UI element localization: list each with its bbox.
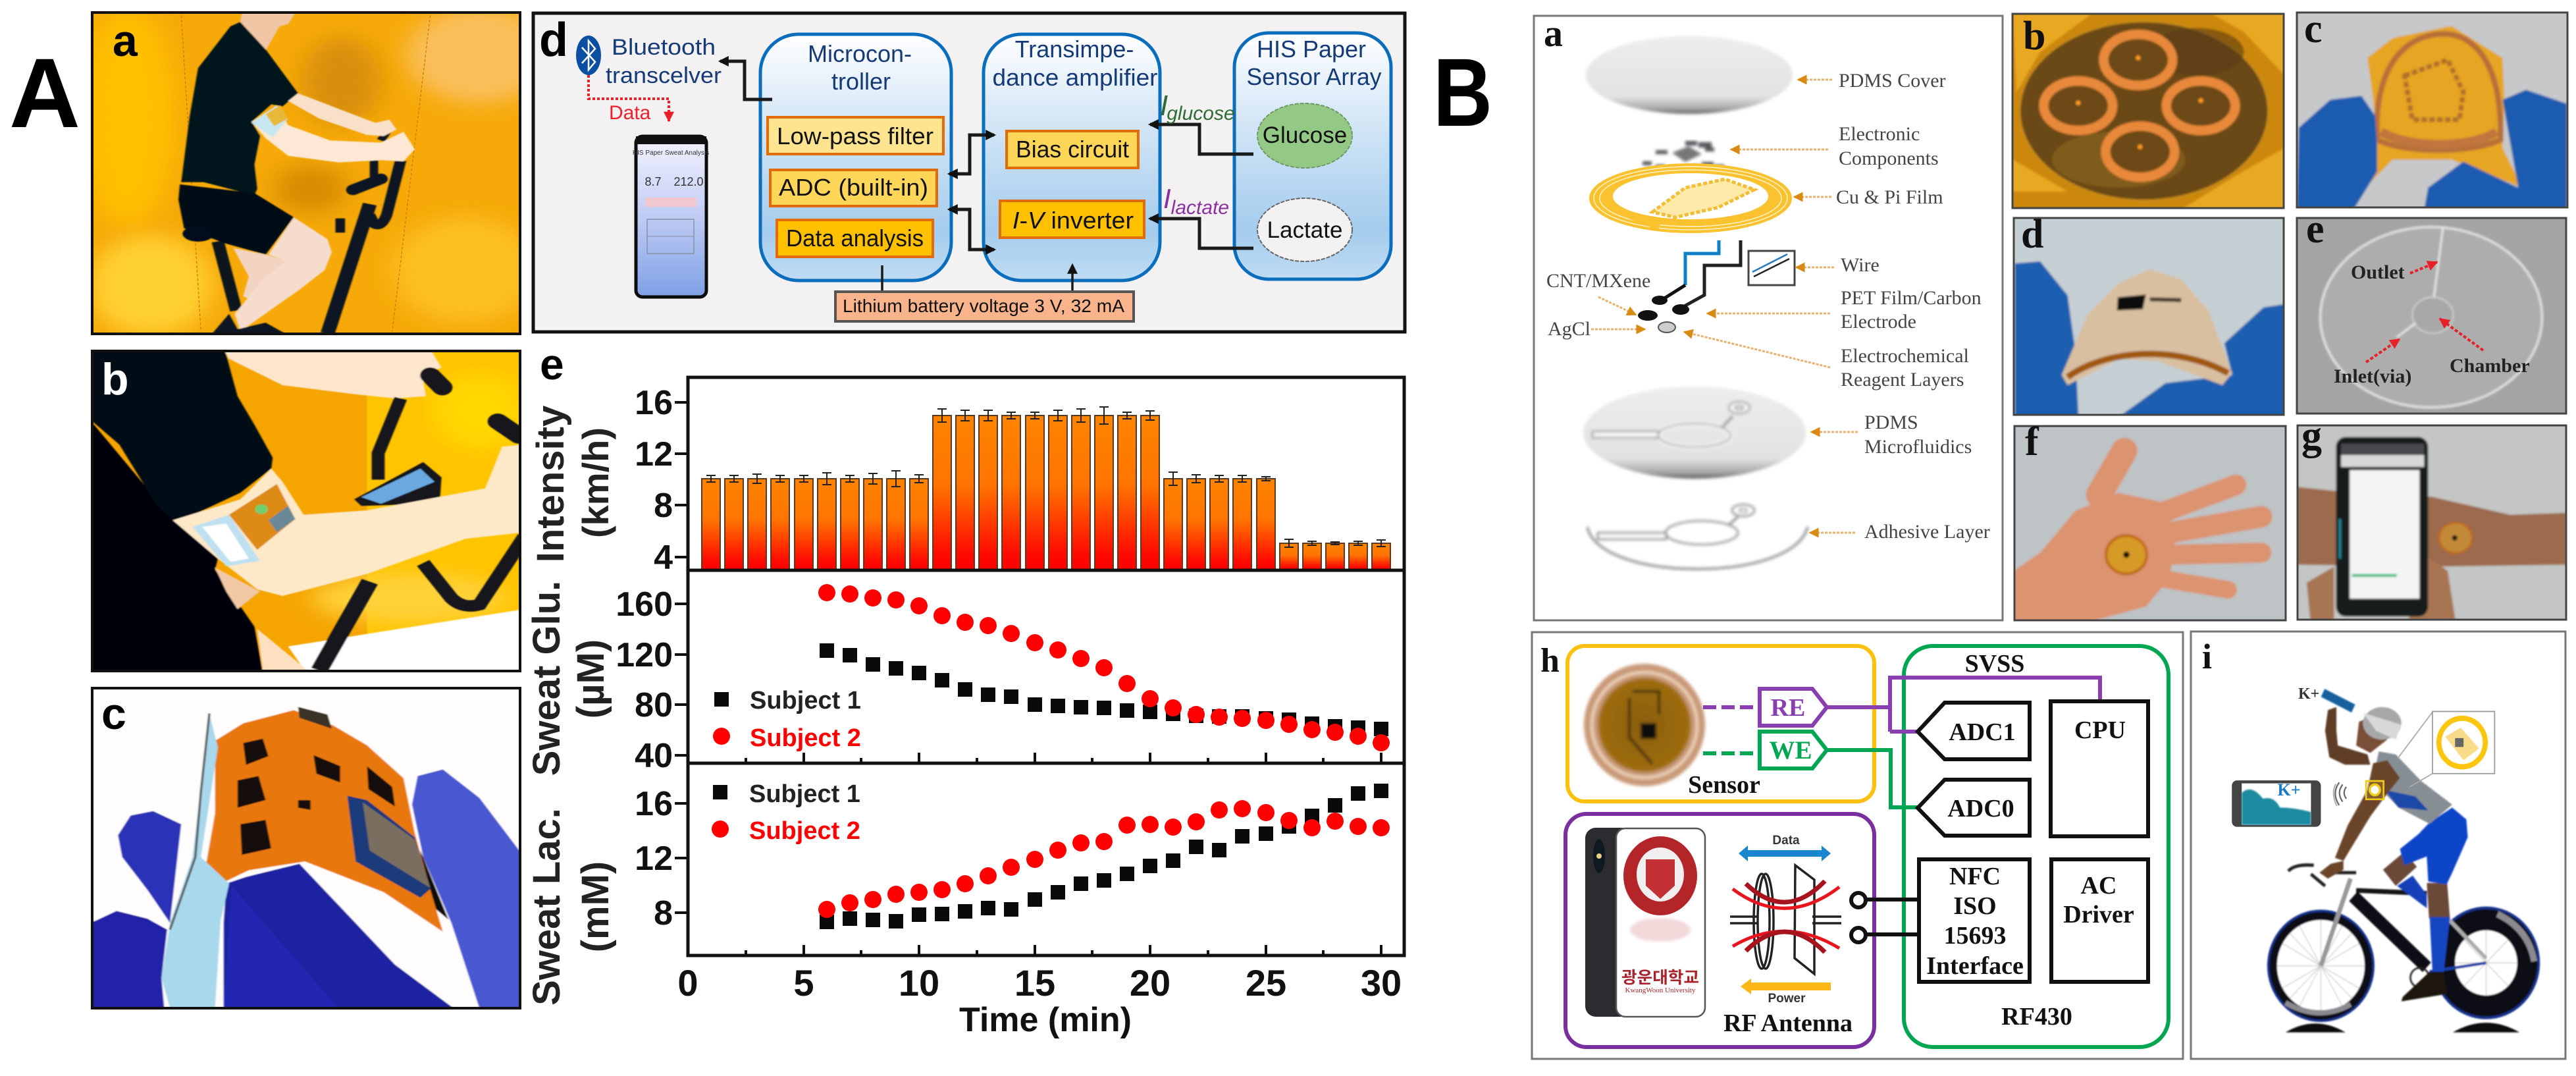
frame and label e <box>2297 207 2566 414</box>
panel: B-f sensor on palm photo <box>2011 419 2289 624</box>
panel label a: a <box>1544 12 1563 55</box>
zoomed sensor callout <box>2398 711 2494 787</box>
panel: B-b wafer photo <box>2009 10 2287 211</box>
callout arrows <box>1591 80 1858 533</box>
wearable sensor marker <box>2366 781 2384 799</box>
panel: A-c flexible circuit photo <box>92 686 525 1011</box>
layer labels: Wire <box>1841 254 1879 276</box>
y tick labels: 12 <box>635 840 673 878</box>
block labels <box>1688 650 2134 1037</box>
x tick labels: 30 <box>1361 962 1402 1004</box>
layer labels <box>1546 70 1990 543</box>
legend: sweat glucose: Subject 1 <box>750 687 861 714</box>
panel: microcontroller: troller <box>831 68 891 95</box>
panel: microcontroller <box>760 34 951 281</box>
frame and label b: b <box>101 354 129 404</box>
panel: B-a exploded device layers <box>1534 12 2003 620</box>
layer labels: Electronic <box>1839 123 1920 145</box>
icon: smartphone: 8.7 <box>644 175 662 188</box>
frame and label g <box>2298 414 2566 620</box>
frame and label b <box>2012 14 2284 208</box>
heading: section B: B <box>1433 39 1492 147</box>
icon: bluetooth <box>576 36 601 75</box>
panel: transimpedance amplifier: Bias circuit <box>1016 136 1129 163</box>
frame and label c: c <box>2304 7 2323 51</box>
RF430 group box <box>1904 646 2169 1047</box>
panel: d block diagram <box>533 13 1405 332</box>
layer labels: PET Film/Carbon <box>1841 287 1982 309</box>
frame and label c <box>92 688 520 1008</box>
connected phone <box>2232 780 2321 827</box>
panel: HIS paper sensor array: HIS Paper <box>1257 36 1366 63</box>
adhesive layer <box>1587 504 1808 569</box>
arrows between blocks <box>720 61 1253 292</box>
y tick labels: 40 <box>635 737 673 775</box>
panel: B-i cyclist illustration <box>2191 632 2565 1059</box>
block labels: NFC <box>1949 863 2001 890</box>
NFC terminals and leads <box>1851 893 1919 942</box>
wires and electrodes <box>1638 240 1741 333</box>
layer labels: Components <box>1839 148 1939 169</box>
data and power arrows with coil illustration <box>1730 834 1841 1006</box>
block labels: AC <box>2081 872 2116 900</box>
data label: Data <box>609 102 651 124</box>
panel: microcontroller: Data analysis <box>786 225 924 252</box>
panel: transimpedance amplifier <box>984 34 1160 281</box>
scatter: sweat glucose subject 1 and 2 <box>827 593 1381 743</box>
red arrows <box>2366 262 2483 362</box>
data and power arrows with coil illustration: Data <box>1772 834 1800 847</box>
frame and label a: a <box>113 16 138 66</box>
y axis title: sweat lactate: Sweat Lac. <box>525 808 568 1006</box>
panel label i: i <box>2202 637 2212 676</box>
x tick labels: 5 <box>793 962 814 1004</box>
bar chart: intensity <box>702 407 1390 570</box>
panel: microcontroller: Low-pass filter <box>777 122 933 149</box>
y tick labels: 8 <box>654 894 673 932</box>
wire detail inset <box>1748 251 1795 285</box>
x tick labels: 10 <box>899 962 939 1004</box>
data and power arrows with coil illustration: Power <box>1768 992 1806 1006</box>
bluetooth label <box>606 35 722 88</box>
legend: sweat lactate: Subject 1 <box>749 780 860 808</box>
current label glucose: glucose <box>1167 103 1235 124</box>
panel: microcontroller: Microcon- <box>808 40 912 67</box>
panel: A-b arm with sensor photo <box>92 350 525 675</box>
copper and PI film coil <box>1589 163 1792 233</box>
layer labels: AgCl <box>1548 318 1590 340</box>
RF430 function blocks <box>1918 701 2148 982</box>
panel: B-d bent encapsulated device photo <box>2011 212 2287 417</box>
sensor photo <box>1584 664 1705 786</box>
frame and label c <box>2297 7 2567 207</box>
x tick labels: 15 <box>1014 962 1055 1004</box>
battery box: Lithium battery voltage 3 V, 32 mA <box>843 296 1124 316</box>
panel: transimpedance amplifier: dance amplifier <box>993 64 1158 91</box>
y tick labels: 160 <box>616 585 673 624</box>
block labels: RF430 <box>2001 1003 2072 1031</box>
frame and label b <box>92 351 520 671</box>
panel label e: e <box>540 340 564 389</box>
panel: HIS paper sensor array: Sensor Array <box>1247 63 1381 90</box>
panel: HIS paper sensor array <box>1234 33 1391 279</box>
block labels: Driver <box>2063 901 2134 928</box>
y axis title: sweat glucose <box>525 581 612 776</box>
x axis title: Time (min) <box>959 1001 1132 1039</box>
panel: B-e microfluidic disk photo <box>2295 207 2569 417</box>
block labels: Interface <box>1926 952 2024 980</box>
PDMS microfluidics disk <box>1583 387 1806 479</box>
panel: microcontroller: ADC (built-in) <box>779 174 928 201</box>
panel: transimpedance amplifier: I-V inverter <box>1012 207 1134 234</box>
layer labels: PDMS <box>1864 412 1918 433</box>
frame and label a <box>92 13 520 334</box>
icon: smartphone: 212.0 <box>673 175 704 188</box>
current label glucose: I <box>1160 90 1168 122</box>
icon: smartphone: HIS Paper Sweat Analysis <box>633 149 709 157</box>
scatter: sweat lactate subject 1 and 2 <box>827 791 1381 922</box>
labels outlet, inlet, chamber: Outlet <box>2351 261 2405 283</box>
PDMS cover disk <box>1586 36 1793 114</box>
y tick labels: 16 <box>635 785 673 823</box>
layer labels: Electrochemical <box>1841 345 1969 367</box>
heading: section A: A <box>9 38 80 148</box>
panel: B-c flexible film photo <box>2295 7 2569 211</box>
RE and WE electrode tags: RE <box>1771 694 1805 722</box>
y axis title: intensity: Intensity <box>529 406 572 562</box>
x tick labels: 0 <box>677 962 698 1004</box>
electronic components <box>1643 141 1724 171</box>
panel: HIS paper sensor array: Lactate <box>1267 217 1342 243</box>
frame and label b: b <box>2023 14 2045 59</box>
y tick labels: 8 <box>654 487 673 525</box>
battery box <box>835 292 1134 321</box>
layer labels: Cu & Pi Film <box>1836 186 1943 208</box>
x tick labels: 25 <box>1246 962 1286 1004</box>
block labels: RF Antenna <box>1723 1009 1853 1037</box>
x tick labels <box>677 962 1402 1004</box>
panel: A-a cyclist photo <box>91 11 521 335</box>
panel label d: d <box>539 14 568 67</box>
panel: e stacked time-series chart <box>525 340 1404 1039</box>
y tick labels: 16 <box>635 384 673 422</box>
potassium label: K+ <box>2298 686 2319 703</box>
layer labels: Electrode <box>1841 311 1916 333</box>
bluetooth label: transcelver <box>606 63 722 88</box>
bluetooth label: Bluetooth <box>612 35 716 60</box>
panel: B-h NFC system block diagram <box>1532 632 2183 1059</box>
wireless signal <box>2334 782 2346 806</box>
panel: transimpedance amplifier: Transimpe- <box>1015 36 1134 63</box>
y axis title: sweat lactate <box>525 808 617 1006</box>
frame and label f <box>2014 419 2286 620</box>
y axis title: sweat glucose: (µM) <box>569 639 612 718</box>
icon: smartphone <box>633 136 709 297</box>
layer labels: PDMS Cover <box>1839 70 1946 92</box>
block labels: SVSS <box>1965 650 2024 678</box>
reader smartphone with university logo: KwangWoon University <box>1625 986 1696 994</box>
panel label h: h <box>1540 642 1560 680</box>
layer labels: CNT/MXene <box>1546 270 1650 292</box>
block labels: Sensor <box>1688 771 1760 799</box>
frame and label g: g <box>2301 414 2322 458</box>
y tick labels: 4 <box>654 539 673 577</box>
reader smartphone with university logo <box>1585 828 1705 1017</box>
chart axes and ticks <box>675 377 1404 955</box>
RE and WE electrode tags <box>1760 689 1827 768</box>
layer labels: Microfluidics <box>1864 436 1972 458</box>
frame and label e: e <box>2306 207 2325 252</box>
block labels: CPU <box>2074 716 2126 744</box>
frame and label f: f <box>2025 419 2039 464</box>
data link arrow <box>589 75 669 121</box>
RF antenna group box <box>1565 814 1874 1047</box>
block labels: ADC0 <box>1947 795 2014 822</box>
labels outlet, inlet, chamber <box>2334 261 2530 387</box>
legend: sweat glucose: Subject 2 <box>750 724 861 752</box>
labels outlet, inlet, chamber: Inlet(via) <box>2334 365 2411 387</box>
y tick labels <box>616 384 673 932</box>
frame and label d <box>2014 212 2284 415</box>
y tick labels: 80 <box>635 686 673 724</box>
legend: sweat lactate <box>712 780 860 845</box>
signal lines <box>1703 678 2100 807</box>
reader smartphone with university logo: 광운대학교 <box>1621 969 1699 987</box>
x tick labels: 20 <box>1130 962 1170 1004</box>
labels outlet, inlet, chamber: Chamber <box>2450 355 2530 377</box>
sensor group box <box>1567 646 1874 801</box>
panel: HIS paper sensor array: Glucose <box>1263 122 1347 148</box>
block labels: ISO <box>1953 892 1997 920</box>
phone K+ label: K+ <box>2277 780 2301 799</box>
y axis title: sweat lactate: (mM) <box>574 861 617 952</box>
y tick labels: 120 <box>616 636 673 674</box>
y axis title: intensity: (km/h) <box>575 427 616 538</box>
current label lactate: lactate <box>1171 197 1229 219</box>
current label lactate: I <box>1163 183 1171 214</box>
cyclist and bicycle <box>2232 693 2538 1033</box>
block labels: ADC1 <box>1949 718 2016 746</box>
y axis title: sweat glucose: Sweat Glu. <box>525 581 568 776</box>
layer labels: Reagent Layers <box>1841 369 1964 390</box>
legend: sweat lactate: Subject 2 <box>749 817 860 845</box>
panel: B-g phone readout photo <box>2295 414 2569 622</box>
RE and WE electrode tags: WE <box>1769 736 1812 765</box>
legend: sweat glucose <box>713 687 861 752</box>
frame and label d: d <box>2021 212 2043 257</box>
y tick labels: 12 <box>635 435 673 473</box>
layer labels: Adhesive Layer <box>1864 521 1990 543</box>
y axis title: intensity <box>529 406 616 562</box>
frame and label c: c <box>101 689 126 739</box>
block labels: 15693 <box>1943 922 2007 950</box>
